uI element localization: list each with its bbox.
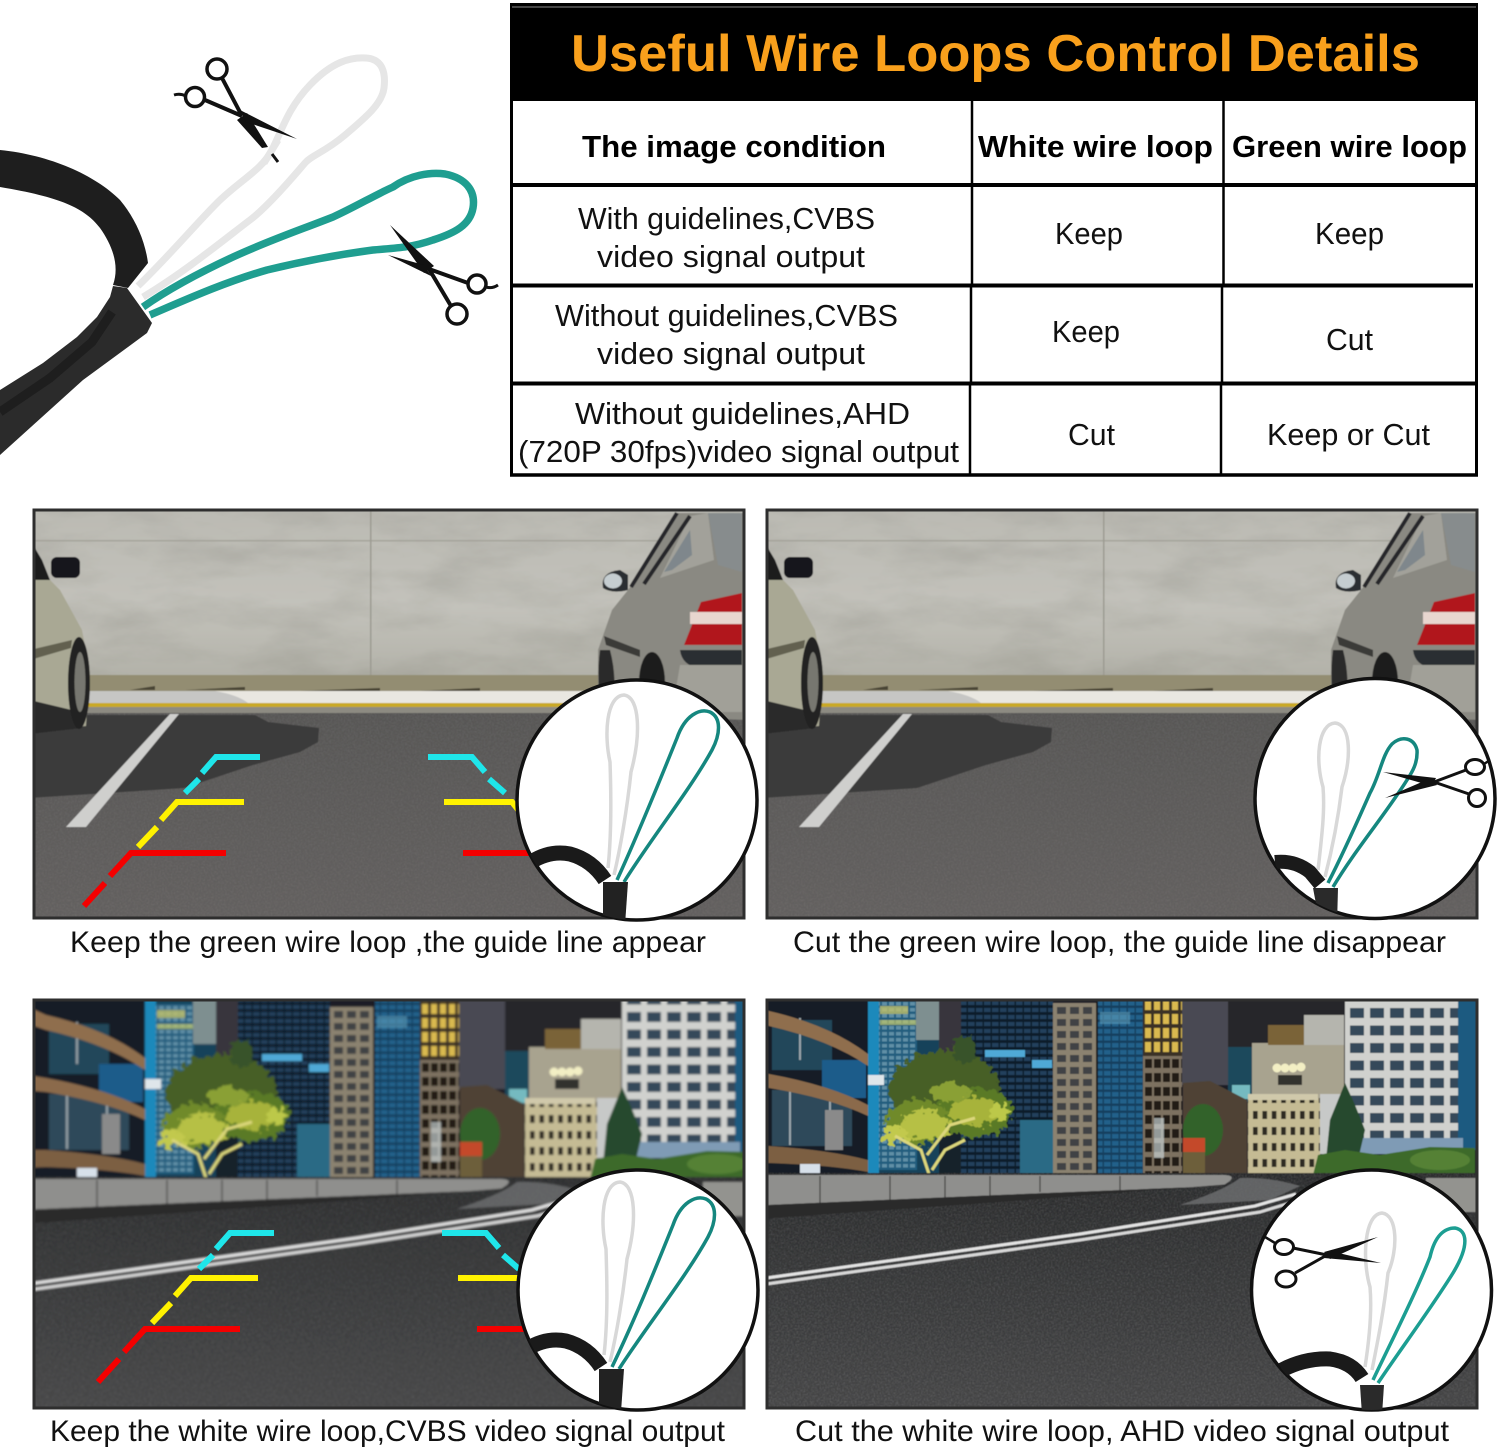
panel: cut white wire: [745, 985, 1492, 1415]
row 1: Keep: [1055, 216, 1123, 251]
inset: green wire cut: [1255, 678, 1495, 925]
row 2: Cut: [1326, 322, 1373, 357]
row 3: (720P 30fps)video signal output: [518, 434, 959, 469]
scissors: [1383, 760, 1490, 806]
control details table: [510, 100, 1478, 476]
row 1: video signal output: [597, 239, 865, 274]
green wire loop: [143, 173, 473, 315]
white wire loop: [138, 58, 384, 297]
inset: wires intact: [518, 1170, 758, 1412]
black cable: [0, 150, 148, 288]
row 3: Without guidelines,AHD: [575, 396, 910, 431]
row 2: [555, 298, 1373, 371]
row 1: With guidelines,CVBS: [578, 201, 875, 236]
photo: city road with guide lines: [22, 989, 762, 1417]
photo: parking lot with guide lines: [30, 505, 750, 928]
row 3: Cut: [1068, 417, 1115, 452]
caption: cut white: Cut the white wire loop, AHD video signal output: [795, 1415, 1450, 1448]
row 1: [578, 201, 1384, 274]
caption: keep green: Keep the green wire loop ,the guide line appear: [70, 926, 706, 959]
photo: parking lot without guide lines: [763, 505, 1483, 928]
caption: cut green: Cut the green wire loop, the guide line disappear: [793, 926, 1446, 959]
header row: The image condition: [582, 129, 886, 164]
cable sheath: [0, 286, 152, 455]
panel: cut green wire: [763, 505, 1495, 928]
header row: White wire loop: [978, 129, 1213, 164]
caption: keep white: Keep the white wire loop,CVBS video signal output: [50, 1415, 726, 1448]
row 3: Keep or Cut: [1267, 417, 1430, 452]
scissors: [1265, 1237, 1381, 1287]
scissors cutting green wire: [388, 225, 498, 324]
panel: keep green wire: [30, 505, 757, 928]
panel: keep white wire: [22, 989, 762, 1417]
row 2: video signal output: [597, 336, 865, 371]
table title: Useful Wire Loops Control Details: [571, 25, 1420, 83]
header row: [582, 129, 1467, 164]
inset: white wire cut: [1252, 1170, 1492, 1415]
cable with wire loops and scissors: [0, 58, 498, 455]
row 2: Without guidelines,CVBS: [555, 298, 898, 333]
row 2: Keep: [1052, 314, 1120, 349]
photo: city road without guide lines: [745, 985, 1485, 1413]
table title: [510, 3, 1478, 101]
row 1: Keep: [1315, 216, 1384, 251]
inset: wires intact: [517, 680, 757, 925]
row 3: [518, 396, 1430, 469]
scissors cutting white wire: [174, 59, 297, 163]
header row: Green wire loop: [1232, 129, 1467, 164]
